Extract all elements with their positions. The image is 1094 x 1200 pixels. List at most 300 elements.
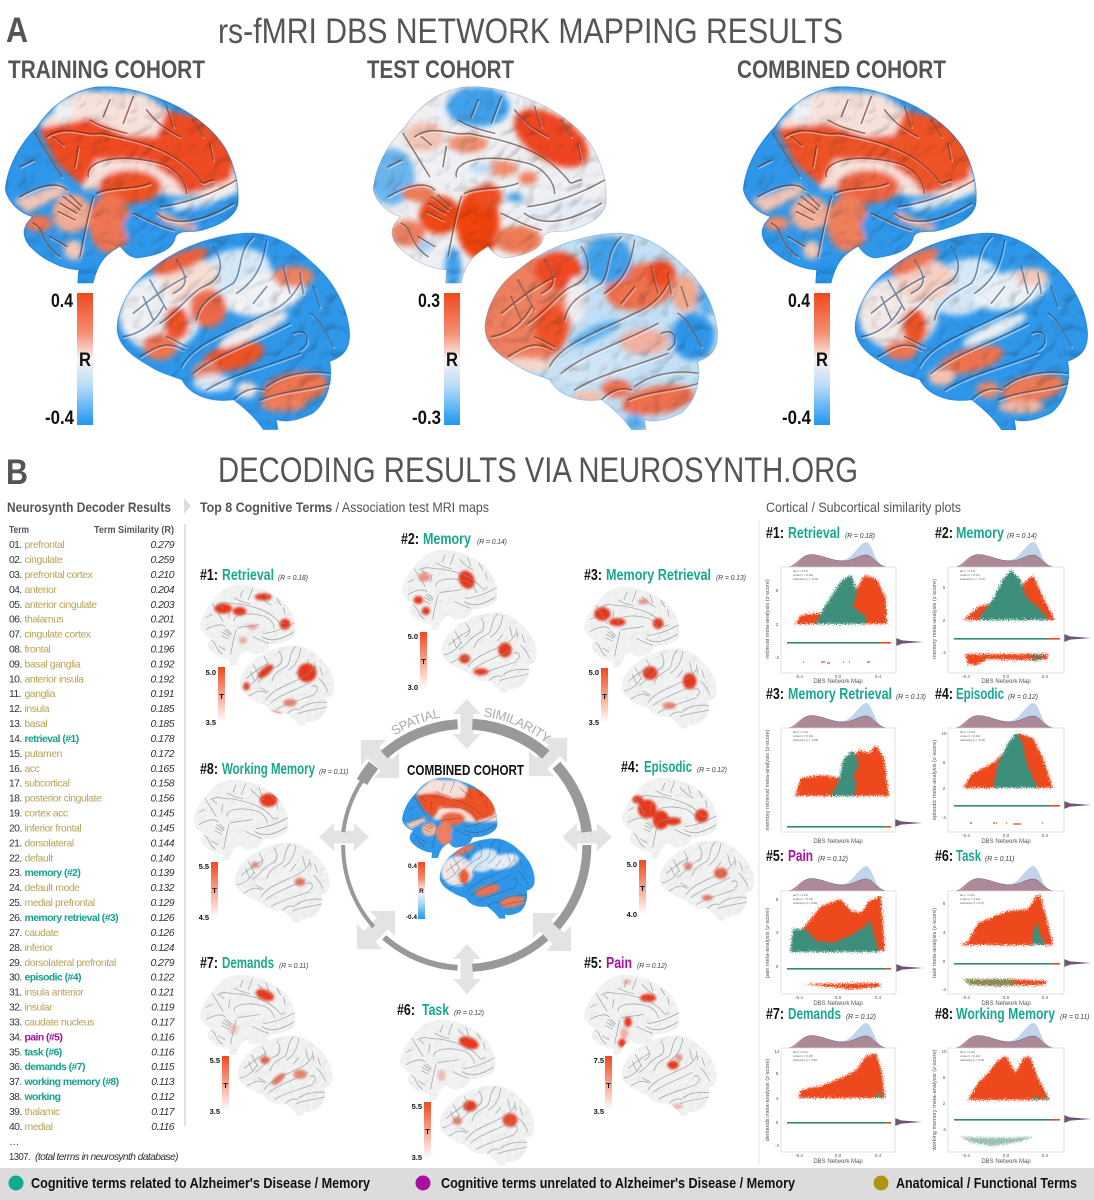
- table: neurosynth decoder terms: 19.: [9, 809, 22, 820]
- table: neurosynth decoder terms: 16.: [9, 764, 22, 775]
- plot title: #5:: [766, 848, 784, 865]
- scatter plot #2 memory: [932, 525, 1091, 685]
- t colorbar: [211, 862, 218, 918]
- table: neurosynth decoder terms: insular: [24, 1002, 53, 1014]
- medial map: [402, 550, 498, 630]
- lateral map: [235, 842, 330, 922]
- scatter plot #7 demands: demands meta-analysis (z-score): [765, 1059, 771, 1141]
- table: neurosynth decoder terms: cingulate cortex: [24, 630, 92, 640]
- table: neurosynth decoder terms: caudate nucleus: [24, 1017, 94, 1028]
- map: #4 episodic: Episodic: [644, 759, 692, 776]
- t colorbar: [218, 667, 225, 722]
- map: #6 task: (R = 0.12): [454, 1010, 484, 1017]
- table: neurosynth decoder terms: task (#6): [24, 1047, 62, 1058]
- scatter plot #5 pain: all (r = 0.12): [793, 893, 808, 897]
- scatter plot #2 memory: 2: [943, 618, 946, 623]
- label: #1:: [200, 567, 218, 584]
- scatter plot #4 episodic: -0.4: [962, 833, 970, 838]
- t colorbar: [601, 668, 608, 723]
- table: neurosynth decoder terms: 27.: [9, 928, 22, 939]
- scatter plot #2 memory: 0.0: [1003, 674, 1010, 679]
- ring label: similarity: SIMILARITY: [484, 708, 552, 742]
- map: #5 pain: Pain: [606, 955, 632, 972]
- scatter plot #8 working memory: cortex (r = 0.14): [960, 1054, 980, 1058]
- map: #5 pain: 7.5: [594, 1056, 604, 1065]
- combined medial surface: [743, 86, 977, 284]
- scatter plot #6 task: subcortex (r = 0.17): [960, 901, 984, 905]
- table: neurosynth decoder terms: 0.279: [150, 540, 175, 551]
- plot title: #6:: [935, 848, 953, 865]
- map: #7 demands: 3.5: [210, 1107, 220, 1116]
- scatter plot #1 retrieval: 0.0: [835, 674, 842, 679]
- table: neurosynth decoder terms: 0.140: [150, 853, 175, 864]
- table: neurosynth decoder terms: 10.: [9, 674, 22, 685]
- scatter plot #2 memory: cortex (r = 0.21): [960, 573, 980, 577]
- scatter plot #1 retrieval: (R = 0.18): [845, 533, 875, 540]
- scatter plot #7 demands: 0: [776, 1120, 779, 1125]
- double arrows on ring: [319, 699, 612, 994]
- map: #5 pain: T: [606, 1081, 611, 1090]
- table: neurosynth decoder terms: 04.: [9, 585, 22, 596]
- heading: training cohort: TRAINING COHORT: [8, 56, 205, 84]
- scatter plot #8 working memory: 0.4: [1042, 1153, 1049, 1158]
- table: neurosynth decoder terms: Term Similarity (R): [94, 524, 174, 536]
- scatter plot #6 task: 8: [943, 901, 946, 906]
- scatter plot #5 pain: (R = 0.12): [818, 856, 848, 863]
- map: #2 memory: (R = 0.14): [477, 539, 507, 546]
- scatter plot #5 pain: DBS Network Map: [813, 1001, 863, 1007]
- table: neurosynth decoder terms: memory (#2): [24, 868, 80, 879]
- scatter plot #1 retrieval: [765, 525, 923, 685]
- training medial surface: [5, 86, 239, 284]
- scatter plot #7 demands: 4: [776, 1096, 779, 1101]
- scatter plot #2 memory: Memory: [956, 525, 1004, 542]
- scatter plot #3 memory retrieval: subcortex (r = -0.06): [793, 738, 818, 742]
- table: neurosynth decoder terms: 25.: [9, 898, 22, 909]
- map: #6 task: Task: [422, 1002, 449, 1019]
- test lateral surface: [484, 232, 718, 430]
- table: neurosynth decoder terms: 18.: [9, 794, 22, 805]
- table: neurosynth decoder terms: 0.139: [150, 868, 175, 879]
- scatter plot #7 demands: DBS Network Map: [813, 1159, 863, 1165]
- scatter plot #6 task: (R = 0.11): [985, 856, 1014, 863]
- table: neurosynth decoder terms: frontal: [24, 644, 51, 655]
- table: neurosynth decoder terms: basal: [24, 719, 47, 730]
- scatter plot #8 working memory: DBS Network Map: [981, 1159, 1031, 1165]
- colorbar: test: 0.3: [418, 291, 440, 312]
- table: neurosynth decoder terms: 0.279: [150, 958, 175, 969]
- scatter plot #4 episodic: (R = 0.12): [1008, 694, 1038, 701]
- medial map: [622, 778, 718, 858]
- table: neurosynth decoder terms: 0.129: [150, 898, 175, 909]
- plot title: #3:: [766, 686, 784, 703]
- centre colorbar: 0.4: [408, 863, 417, 870]
- lateral map: [442, 612, 536, 692]
- brain pair: training cohort: [0, 80, 357, 437]
- scatter plot #7 demands: (R = 0.12): [846, 1014, 876, 1021]
- brain pair: combined cohort: [738, 80, 1094, 437]
- colorbar: combined: 0.4: [788, 291, 810, 312]
- map: #5 pain: 3.5: [594, 1107, 604, 1116]
- map: #2 memory: [400, 531, 540, 696]
- scatter plot #4 episodic: -2: [942, 815, 946, 820]
- scatter plot #1 retrieval: -2: [775, 655, 779, 660]
- table: neurosynth decoder terms: default: [24, 853, 53, 864]
- scatter plot #1 retrieval: cortex (r = 0.29): [793, 573, 813, 577]
- table: neurosynth decoder terms: 0.117: [151, 1017, 176, 1028]
- scatter plot #8 working memory: (R = 0.11): [1060, 1014, 1089, 1021]
- centre brain: lateral: [440, 838, 535, 919]
- table: neurosynth decoder terms: 24.: [9, 883, 22, 894]
- scatter plot #6 task: cortex (r = 0.14): [960, 897, 980, 901]
- scatter plot #8 working memory: 6: [943, 1075, 946, 1080]
- map: #6 task: T: [425, 1127, 430, 1136]
- scatter plot #4 episodic: 10: [941, 731, 947, 736]
- label: #3:: [584, 567, 602, 584]
- scatter plot #7 demands: cortex (r = 0.15): [793, 1054, 813, 1058]
- scatter plot #4 episodic: subcortex (r = -0.14): [960, 738, 985, 742]
- table: neurosynth decoder terms: 0.197: [150, 630, 176, 640]
- table: neurosynth decoder terms: posterior cingulate: [24, 794, 102, 805]
- centre colorbar: -0.4: [406, 914, 417, 921]
- title: network mapping: rs-fMRI DBS NETWORK MAPPING RESULTS: [218, 12, 843, 51]
- plot title: #7:: [766, 1006, 784, 1023]
- table: neurosynth decoder terms: 36.: [9, 1062, 22, 1073]
- table: neurosynth decoder terms: 0.185: [150, 719, 175, 730]
- map: #3 memory retrieval: 5.0: [589, 668, 599, 677]
- scatter plot #4 episodic: [932, 686, 1091, 845]
- lateral map: [440, 1086, 534, 1166]
- scatter plot #4 episodic: DBS Network Map: [981, 839, 1031, 845]
- table: neurosynth decoder terms: …: [9, 1137, 19, 1148]
- scatter plot #4 episodic: 6: [943, 760, 946, 765]
- scatter plot #4 episodic: 0.0: [1003, 833, 1010, 838]
- scatter plot #6 task: DBS Network Map: [981, 1001, 1031, 1007]
- centre colorbar: R: [419, 888, 424, 895]
- table: neurosynth decoder terms: 29.: [9, 958, 22, 969]
- table: neurosynth decoder terms: 0.156: [150, 794, 175, 805]
- table: neurosynth decoder terms: medial prefrontal: [24, 898, 95, 909]
- scatter plot #7 demands: all (r = 0.11): [793, 1050, 808, 1054]
- label: #2:: [401, 531, 419, 548]
- table: neurosynth decoder terms: 0.259: [150, 555, 175, 566]
- table: neurosynth decoder terms: default mode: [24, 883, 80, 894]
- scatter plot #5 pain: Pain: [788, 848, 813, 865]
- table: neurosynth decoder terms: anterior insula: [24, 674, 84, 685]
- table: neurosynth decoder terms: 0.192: [150, 659, 175, 670]
- scatter plot #4 episodic: all (r = 0.12): [960, 730, 975, 734]
- heading: similarity plots: Cortical / Subcortical similarity plots: [766, 499, 961, 515]
- scatter plot #8 working memory: 2: [943, 1101, 946, 1106]
- scatter plot #7 demands: subcortex (r = 0.02): [793, 1058, 817, 1062]
- medial map: [193, 780, 288, 860]
- table: neurosynth decoder terms: 0.121: [150, 988, 174, 999]
- scatter plot #2 memory: DBS Network Map: [981, 679, 1031, 685]
- label: #4:: [621, 759, 639, 776]
- medial map: [400, 1020, 496, 1100]
- map: #8 working memory: T: [212, 886, 217, 895]
- medial map: [200, 974, 296, 1055]
- scatter plot #3 memory retrieval: all (r = 0.12): [793, 730, 808, 734]
- table: neurosynth decoder terms: insula: [24, 704, 50, 715]
- table: neurosynth decoder terms: 22.: [9, 853, 22, 864]
- heading: test cohort: TEST COHORT: [367, 56, 514, 84]
- table: neurosynth decoder terms: 32.: [9, 1002, 22, 1014]
- scatter plot #3 memory retrieval: (R = 0.13): [896, 694, 926, 701]
- scatter plot #6 task: 0.0: [1003, 995, 1010, 1000]
- table: neurosynth decoder terms: thalamus: [24, 615, 64, 626]
- scatter plot #5 pain: subcortex (r = 0.09): [793, 901, 817, 905]
- scatter plot #5 pain: pain meta-analysis (z-score): [765, 908, 771, 978]
- scatter plot #4 episodic: episodic meta-analysis (z-score): [932, 740, 938, 820]
- label: #6:: [397, 1002, 415, 1019]
- table: neurosynth decoder terms: dorsolateral: [24, 838, 74, 849]
- title: decoding results: DECODING RESULTS VIA NEUROSYNTH.ORG: [218, 451, 858, 490]
- table: neurosynth decoder terms: 08.: [9, 644, 22, 655]
- map: #2 memory: T: [421, 657, 426, 666]
- table: neurosynth decoder terms: thalamic: [24, 1107, 60, 1118]
- scatter plot #5 pain: [765, 848, 923, 1007]
- scatter plot #8 working memory: all (r = 0.10): [960, 1050, 975, 1054]
- map: #1 retrieval: [198, 567, 338, 729]
- plot title: #4:: [935, 686, 953, 703]
- map: #4 episodic: 4.0: [627, 910, 637, 919]
- scatter plot #5 pain: 8: [776, 897, 779, 902]
- scatter plot #6 task: [932, 848, 1091, 1007]
- colorbar: combined: R: [816, 350, 828, 371]
- table: neurosynth decoder terms: anterior cingulate: [24, 600, 97, 611]
- table: neurosynth decoder terms: 06.: [9, 615, 22, 626]
- table: neurosynth decoder terms: 05.: [9, 600, 22, 611]
- scatter plot #3 memory retrieval: Memory Retrieval: [788, 686, 892, 703]
- scatter plot #6 task: 0.4: [1042, 995, 1049, 1000]
- table: neurosynth decoder terms: 0.144: [150, 838, 175, 849]
- scatter plot #5 pain: 0: [776, 964, 779, 969]
- scatter plot #2 memory: -2: [942, 650, 946, 655]
- table: neurosynth decoder terms: 09.: [9, 659, 22, 670]
- map: #3 memory retrieval: (R = 0.13): [716, 575, 746, 582]
- map: #6 task: [397, 1002, 538, 1169]
- table: neurosynth decoder terms: 28.: [9, 943, 22, 954]
- table: neurosynth decoder terms: 0.124: [150, 943, 175, 954]
- map: #8 working memory: [191, 761, 348, 926]
- scatter plot #1 retrieval: -0.4: [795, 674, 803, 679]
- table: neurosynth decoder terms: 02.: [9, 555, 22, 566]
- scatter plot #1 retrieval: 2: [776, 622, 779, 627]
- table: neurosynth decoder terms: 38.: [9, 1092, 22, 1103]
- table: neurosynth decoder terms: insula anterior: [24, 988, 84, 999]
- table: neurosynth decoder terms: 33.: [9, 1017, 22, 1028]
- scatter plot #8 working memory: subcortex (r = 0.13): [960, 1058, 984, 1062]
- map: #3 memory retrieval: Memory Retrieval: [606, 567, 711, 584]
- table: neurosynth decoder terms: 17.: [9, 779, 22, 790]
- scatter plot #8 working memory: 10: [941, 1049, 947, 1054]
- table: neurosynth decoder terms: working: [24, 1092, 61, 1103]
- table: neurosynth decoder terms: 0.126: [150, 928, 175, 939]
- table: neurosynth decoder terms: dorsolateral prefrontal: [24, 958, 116, 969]
- scatter plot #6 task: -0.4: [962, 995, 970, 1000]
- medial map: [584, 974, 680, 1055]
- table: neurosynth decoder terms: 11.: [9, 689, 21, 700]
- scatter plot #1 retrieval: subcortex (r = -0.11): [793, 577, 818, 581]
- map: #1 retrieval: Retrieval: [222, 567, 274, 584]
- scatter plot #8 working memory: 0.0: [1003, 1153, 1010, 1158]
- scatter plot #7 demands: Demands: [788, 1006, 841, 1023]
- t colorbar: [639, 860, 646, 915]
- map: #6 task: 5.5: [412, 1102, 422, 1111]
- map: #8 working memory: (R = 0.11): [319, 769, 348, 776]
- scatter plot #8 working memory: working memory meta-analysis (z-score): [932, 1050, 938, 1151]
- scatter plot #1 retrieval: 0.4: [875, 674, 882, 679]
- table: neurosynth decoder terms: 0.145: [150, 824, 175, 834]
- table: neurosynth decoder terms: 12.: [9, 704, 22, 715]
- map: #4 episodic: 5.0: [627, 860, 637, 869]
- table: neurosynth decoder terms: 0.115: [151, 1062, 175, 1073]
- table: neurosynth decoder terms: 0.116: [151, 1122, 175, 1133]
- scatter plot #4 episodic: cortex (r = 0.19): [960, 734, 980, 738]
- table: neurosynth decoder terms: memory retrieval (#3): [24, 913, 118, 924]
- colorbar: test: -0.3: [412, 408, 441, 429]
- heading: decoder results: Neurosynth Decoder Results: [7, 499, 171, 515]
- lateral map: [660, 840, 754, 920]
- table: neurosynth decoder terms: 0.112: [151, 1092, 175, 1103]
- scatter plot #1 retrieval: retrieval meta-analysis (z-score): [765, 579, 771, 659]
- colorbar: combined: -0.4: [782, 408, 811, 429]
- map: #5 pain: [582, 955, 720, 1119]
- table: neurosynth decoder terms: 0.116: [151, 1047, 175, 1058]
- scatter plot #2 memory: 0.4: [1042, 674, 1049, 679]
- table: neurosynth decoder terms: inferior frontal: [24, 824, 81, 834]
- table: neurosynth decoder terms: 0.191: [150, 689, 174, 700]
- heading: top 8 cognitive terms: Top 8 Cognitive Terms / Association test MRI maps: [200, 499, 489, 515]
- table: neurosynth decoder terms: caudate: [24, 928, 59, 939]
- heading: combined cohort: COMBINED COHORT: [737, 56, 946, 84]
- table: neurosynth decoder terms: 0.122: [150, 973, 175, 984]
- scatter plot #5 pain: 0.4: [875, 995, 882, 1000]
- table: neurosynth decoder terms: 0.119: [151, 1002, 175, 1014]
- table: neurosynth decoder terms: 0.158: [150, 779, 175, 790]
- label: #7:: [200, 955, 218, 972]
- table: neurosynth decoder terms: (total terms in neurosynth database): [35, 1152, 178, 1163]
- table: neurosynth decoder terms: working memory (#8): [24, 1077, 119, 1088]
- table: neurosynth decoder terms: 39.: [9, 1107, 22, 1118]
- centre brain: medial: [402, 778, 498, 858]
- scatter plot #7 demands: 12: [774, 1049, 780, 1054]
- map: #7 demands: (R = 0.11): [279, 963, 308, 970]
- table: neurosynth decoder terms: subcortical: [24, 779, 70, 790]
- plot title: #8:: [935, 1006, 953, 1023]
- map: #2 memory: 5.0: [408, 632, 418, 641]
- map: #3 memory retrieval: [582, 567, 746, 732]
- table: neurosynth decoder terms: 30.: [9, 973, 22, 984]
- scatter plot #8 working memory: Working Memory: [956, 1006, 1055, 1023]
- table: neurosynth decoder terms: prefrontal: [24, 540, 64, 551]
- map: #7 demands: Demands: [222, 955, 274, 972]
- table: neurosynth decoder terms: 01.: [9, 540, 22, 551]
- table: neurosynth decoder terms: cortex acc: [24, 809, 68, 820]
- table: neurosynth decoder terms: 37.: [9, 1077, 22, 1088]
- table: neurosynth decoder terms: 13.: [9, 719, 22, 730]
- map: #8 working memory: 4.5: [199, 913, 209, 922]
- table: neurosynth decoder terms: 0.192: [150, 674, 175, 685]
- map: #2 memory: 3.0: [408, 683, 418, 692]
- map: #2 memory: Memory: [423, 531, 471, 548]
- table: neurosynth decoder terms: 14.: [9, 734, 22, 745]
- table: neurosynth decoder terms: 40.: [9, 1122, 22, 1133]
- scatter plot #6 task: 0: [943, 959, 946, 964]
- map: #5 pain: (R = 0.12): [637, 963, 667, 970]
- table: neurosynth decoder terms: putamen: [24, 749, 63, 760]
- scatter plot #7 demands: -0.4: [795, 1153, 803, 1158]
- colorbar: training: [45, 291, 93, 429]
- table: neurosynth decoder terms: [9, 520, 759, 1165]
- table: neurosynth decoder terms: acc: [24, 764, 40, 775]
- lateral map: [622, 648, 716, 728]
- scatter plot #2 memory: all (r = 0.13): [960, 569, 975, 573]
- map: #7 demands: T: [223, 1081, 228, 1090]
- scatter plot #5 pain: 4: [776, 930, 779, 935]
- scatter plot #4 episodic: 0.4: [1042, 833, 1049, 838]
- training lateral surface: [116, 232, 350, 430]
- scatter plot #6 task: 4: [943, 930, 946, 935]
- table: neurosynth decoder terms: retrieval (#1): [24, 734, 79, 745]
- table: neurosynth decoder terms: 31.: [9, 988, 22, 999]
- arrow: header chevron: [184, 498, 191, 514]
- scatter plot #8 working memory: -2: [942, 1127, 946, 1132]
- map: #1 retrieval: (R = 0.18): [278, 575, 308, 582]
- ring label: spatial: SPATIAL: [392, 710, 440, 734]
- table: neurosynth decoder terms: 0.185: [150, 704, 175, 715]
- scatter plot #7 demands: [765, 1006, 922, 1165]
- map: #4 episodic: (R = 0.12): [697, 767, 727, 774]
- colorbar: test: [412, 291, 460, 429]
- map: #7 demands: [198, 955, 336, 1119]
- scatter plot #3 memory retrieval: cortex (r = 0.19): [793, 734, 813, 738]
- table: neurosynth decoder terms: 0.178: [150, 734, 175, 745]
- table: neurosynth decoder terms: basal ganglia: [24, 659, 81, 670]
- scatter plot #7 demands: 8: [776, 1071, 779, 1076]
- map: #7 demands: 5.5: [210, 1056, 220, 1065]
- table: neurosynth decoder terms: 0.132: [150, 883, 175, 894]
- scatter plot #1 retrieval: all (r = 0.17): [793, 569, 808, 573]
- map: #3 memory retrieval: 3.5: [589, 718, 599, 727]
- map: #8 working memory: Working Memory: [222, 761, 315, 778]
- test medial surface: [373, 86, 606, 284]
- panel label B: B: [6, 453, 28, 492]
- scatter plot #2 memory: 6: [943, 585, 946, 590]
- combined lateral surface: [854, 232, 1088, 430]
- colorbar: combined: [782, 291, 830, 429]
- table: neurosynth decoder terms: ganglia: [24, 689, 56, 700]
- scatter plot #3 memory retrieval: memory retrieval meta-analysis (z-score): [765, 729, 771, 831]
- legend bar: [0, 1168, 1094, 1200]
- scatter plot #8 working memory: -0.4: [962, 1153, 970, 1158]
- table: neurosynth decoder terms: 0.204: [150, 585, 175, 596]
- scatter plot #6 task: all (r = 0.11): [960, 893, 975, 897]
- scatter plot #8 working memory: [932, 1006, 1091, 1165]
- scatter plot #7 demands: 0.4: [875, 1153, 882, 1158]
- map: #8 working memory: 5.5: [199, 862, 209, 871]
- ring segments: [343, 724, 587, 968]
- panel label A: A: [6, 11, 28, 50]
- table: neurosynth decoder terms: 07.: [9, 630, 22, 640]
- scatter plot #7 demands: -4: [775, 1143, 779, 1148]
- map: #6 task: 3.5: [412, 1153, 422, 1162]
- table: neurosynth decoder terms: 21.: [9, 838, 22, 849]
- table: neurosynth decoder terms: 26.: [9, 913, 22, 924]
- map: #4 episodic: T: [640, 884, 645, 893]
- map: #3 memory retrieval: T: [602, 692, 607, 701]
